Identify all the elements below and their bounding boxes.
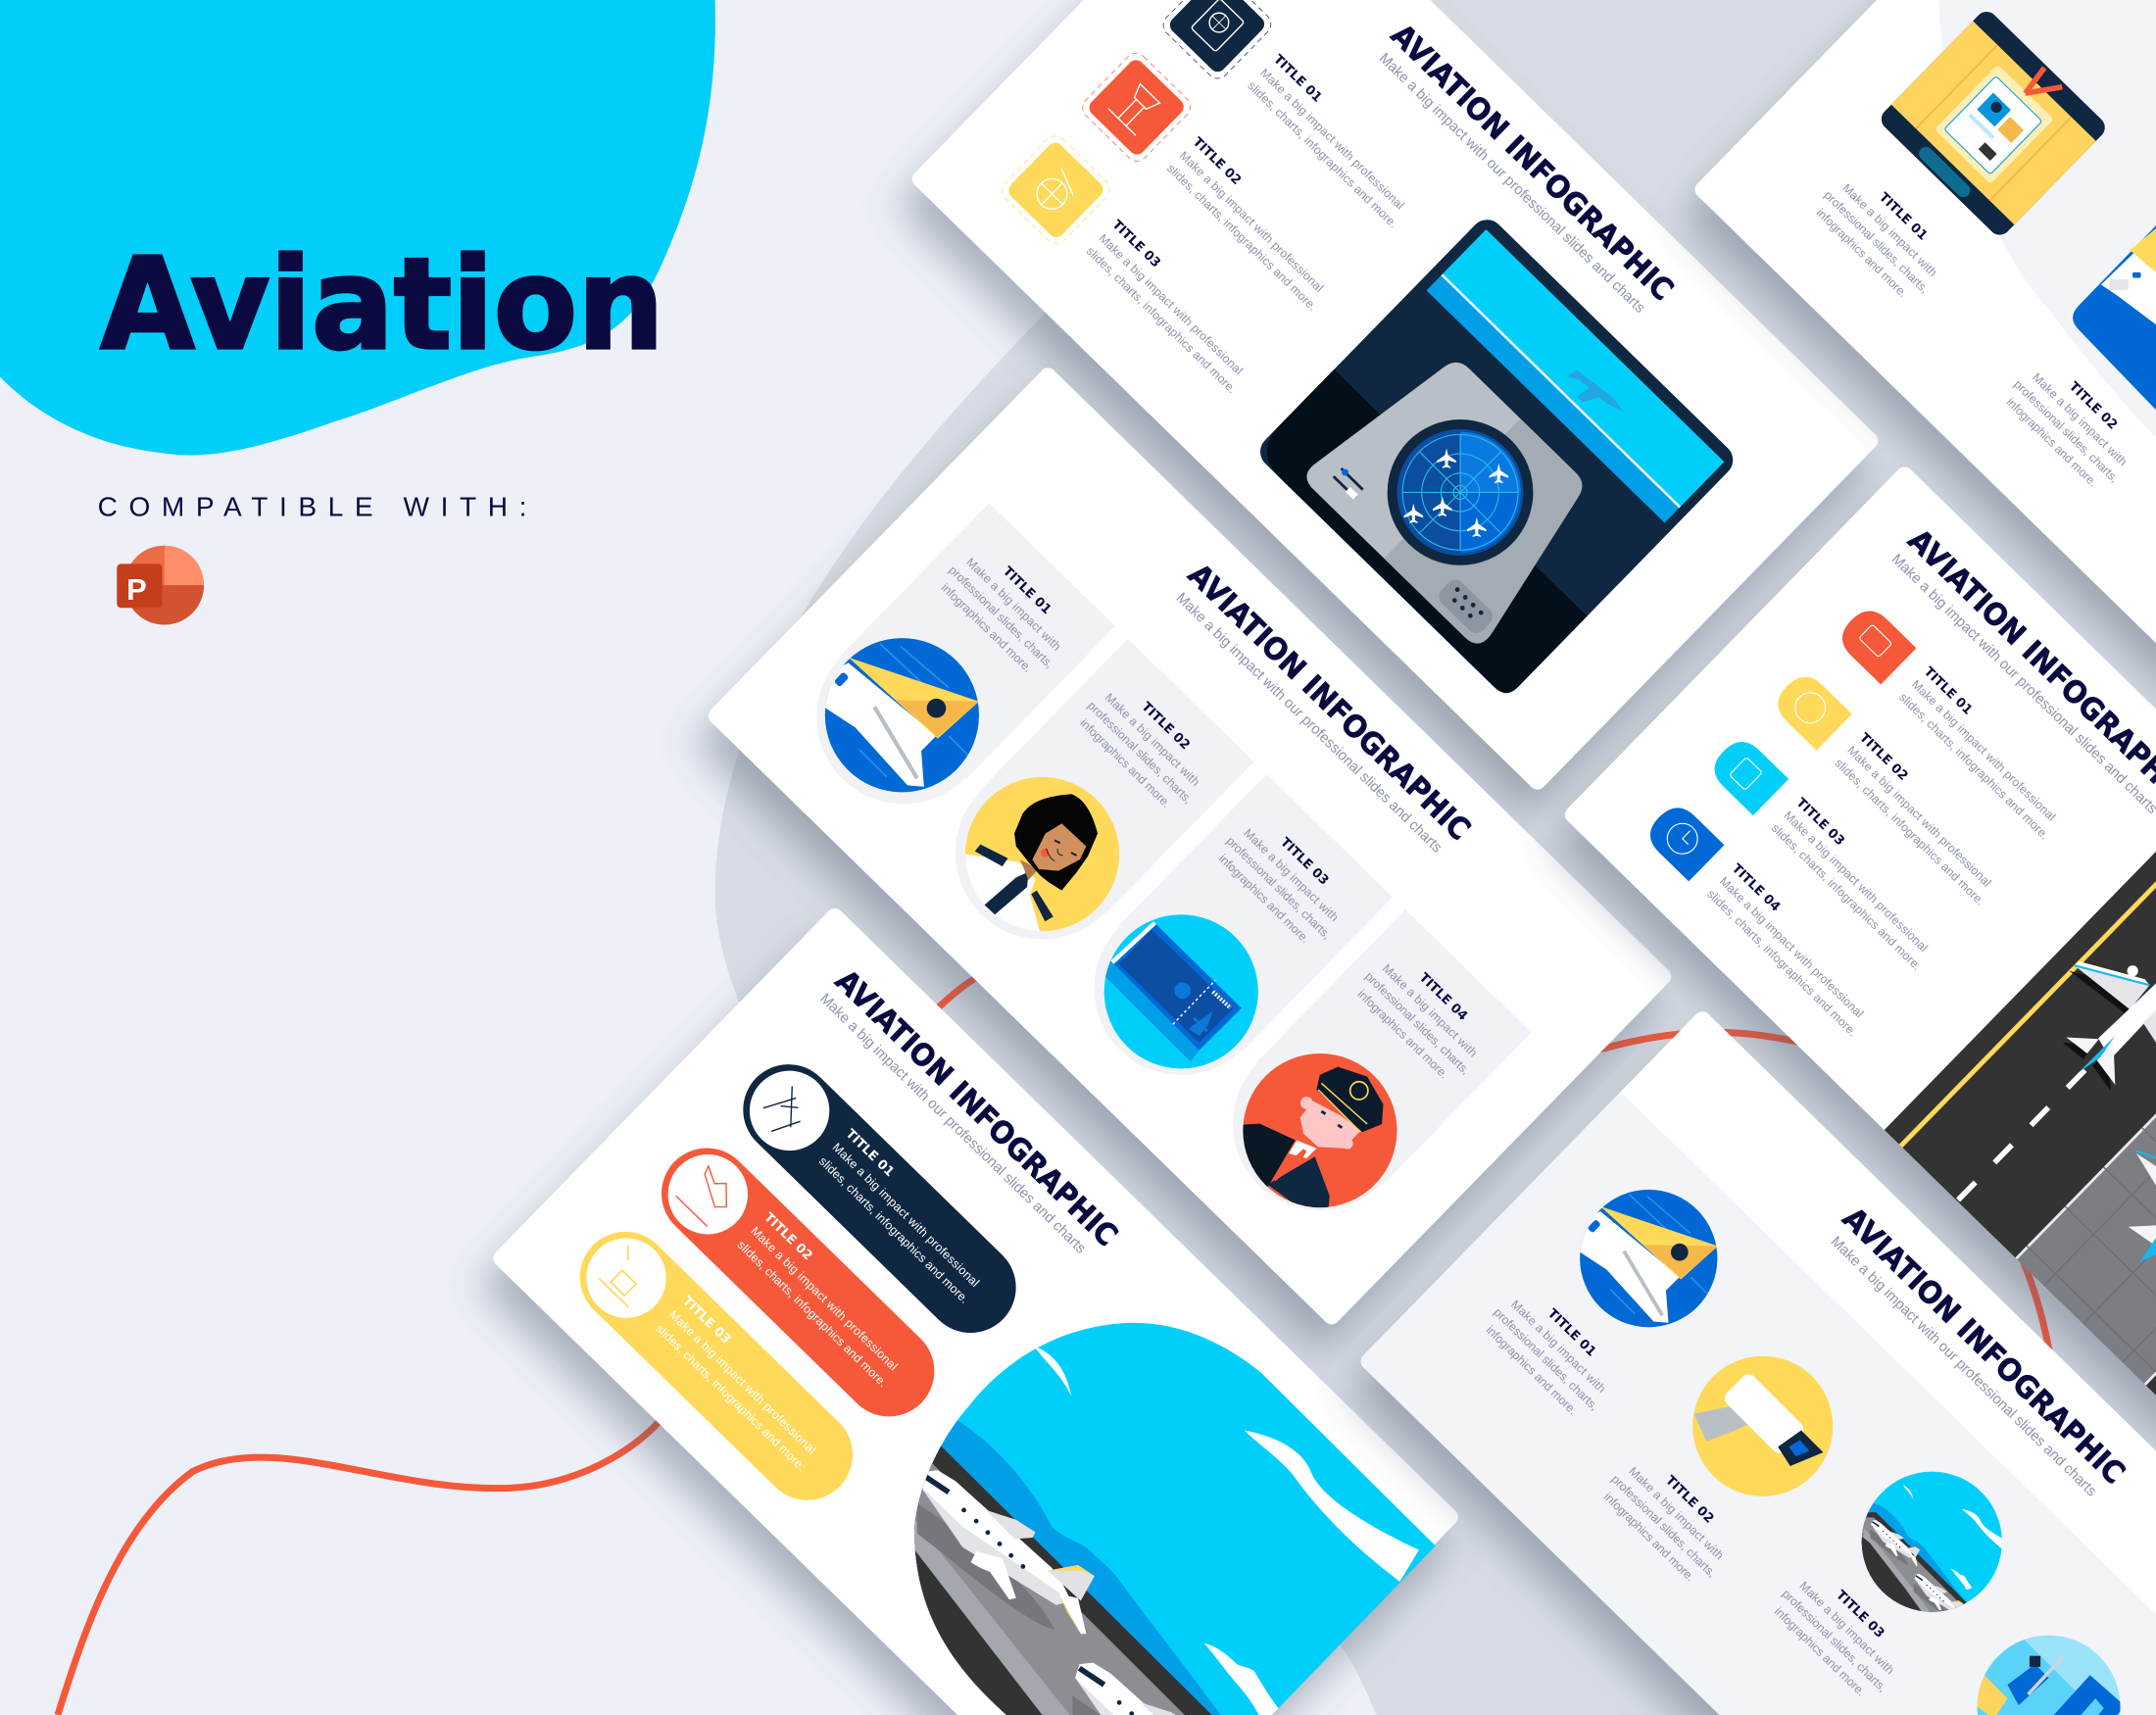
illustration: captain bbox=[1238, 1051, 1399, 1213]
tab icon: blue bbox=[1642, 799, 1724, 881]
item text 01: infographics and more. bbox=[1484, 1323, 1580, 1417]
column 1: Make a big impact with bbox=[963, 556, 1063, 654]
item text 01: Make a big impact with bbox=[1508, 1298, 1608, 1396]
pill 02: TITLE 02 bbox=[760, 1210, 815, 1263]
item text 03: Make a big impact with professional bbox=[1097, 231, 1246, 377]
illustration: airport scene dome bbox=[914, 1323, 1436, 1715]
radar screen bbox=[1388, 419, 1533, 565]
column 4: Make a big impact with bbox=[1380, 961, 1480, 1059]
item text 03: Make a big impact with professional bbox=[1782, 808, 1931, 955]
item text 01: infographics and more. bbox=[1814, 206, 1910, 300]
slide heading: AVIATION INFOGRAPHIC bbox=[1181, 557, 1477, 848]
column 1: infographics and more. bbox=[939, 581, 1035, 675]
item text 01: Make a big impact with professional bbox=[1909, 677, 2058, 823]
item text 01: professional slides, charts, bbox=[1821, 188, 1932, 296]
item text 02: Make a big impact with bbox=[2030, 370, 2130, 468]
item text 01: TITLE 01 bbox=[1921, 664, 1975, 718]
item text 04: TITLE 04 bbox=[1729, 861, 1783, 914]
item text 01: professional slides, charts, bbox=[1491, 1305, 1601, 1413]
slide subtitle: Make a big impact with our professional slides and charts bbox=[1376, 50, 1648, 317]
item text 02: Make a big impact with bbox=[1626, 1464, 1727, 1562]
pill 02: Make a big impact with professional bbox=[748, 1224, 901, 1373]
illustration: taxiing airplanes bbox=[2063, 961, 2156, 1262]
item text 03: TITLE 03 bbox=[1833, 1588, 1886, 1642]
panel: bottom right slide with grey band bbox=[1357, 1008, 2156, 1715]
illustration: boarding pass bbox=[1103, 914, 1258, 1068]
item text 02: TITLE 02 bbox=[1856, 730, 1910, 784]
pill 02 bbox=[643, 1129, 954, 1436]
column 3: infographics and more. bbox=[1216, 852, 1312, 946]
column 1: professional slides, charts, bbox=[946, 564, 1056, 671]
icon: control tower bbox=[1078, 49, 1195, 166]
item text 01: slides, charts, infographics and more. bbox=[1245, 78, 1400, 230]
item text 02: Make a big impact with professional bbox=[1177, 149, 1326, 295]
item text 03: Make a big impact with bbox=[1796, 1579, 1897, 1677]
icon: globe and plane bbox=[998, 131, 1114, 248]
item text 01: slides, charts, infographics and more. bbox=[1896, 690, 2052, 842]
grey content band bbox=[1357, 1092, 2156, 1715]
decorative grey backdrop shape bbox=[715, 0, 2156, 1715]
slide heading: AVIATION INFOGRAPHIC bbox=[1836, 1200, 2132, 1492]
column 4: professional slides, charts, bbox=[1362, 969, 1472, 1077]
item text 03: TITLE 03 bbox=[1793, 796, 1847, 849]
item text 02 bbox=[1596, 1446, 1744, 1592]
panel: bottom left slide with pills bbox=[490, 905, 1471, 1715]
item text 03: TITLE 03 bbox=[1109, 218, 1163, 270]
column 2: TITLE 02 bbox=[1139, 700, 1193, 753]
pill 01: slides, charts, infographics and more. bbox=[816, 1154, 971, 1306]
icon: PowerPoint logo: P bbox=[126, 572, 147, 607]
column 2 bbox=[918, 639, 1253, 976]
pill 03: TITLE 03 bbox=[679, 1294, 733, 1348]
panel: top right slide with ID badge bbox=[1691, 0, 2156, 799]
item text 02: slides, charts, infographics and more. bbox=[1832, 757, 1987, 908]
compatible with label: COMPATIBLE WITH: bbox=[98, 491, 526, 521]
decorative orange curve bbox=[58, 963, 2051, 1715]
column 3 bbox=[1057, 774, 1393, 1111]
item text 02: TITLE 02 bbox=[2066, 379, 2120, 433]
item text 01: TITLE 01 bbox=[1544, 1306, 1598, 1359]
item text 02: slides, charts, infographics and more. bbox=[1164, 162, 1319, 314]
item text 03 bbox=[1767, 1560, 1915, 1707]
panel: top slide with radar bbox=[908, 0, 1882, 793]
item text 01: TITLE 01 bbox=[1270, 52, 1324, 106]
slide subtitle: Make a big impact with our professional slides and charts bbox=[1828, 1233, 2100, 1500]
tab icon: yellow bbox=[1769, 668, 1852, 751]
pill 03 bbox=[562, 1213, 871, 1519]
item text 02 bbox=[1999, 351, 2147, 498]
tab icon: cyan bbox=[1706, 733, 1788, 815]
panel: centre slide with four circles bbox=[705, 365, 1675, 1328]
illustration: wing circle bbox=[825, 638, 979, 792]
item text 04: slides, charts, infographics and more. bbox=[1704, 887, 1860, 1039]
light backdrop shape bbox=[1938, 0, 2156, 437]
illustration: airport scene small bbox=[1862, 1472, 2002, 1612]
column 2: Make a big impact with bbox=[1102, 691, 1202, 789]
illustration: woman pilot bbox=[964, 776, 1119, 931]
pill 03: slides, charts, infographics and more. bbox=[653, 1321, 808, 1474]
slide subtitle: Make a big impact with our professional slides and charts bbox=[1173, 590, 1446, 857]
column 4 bbox=[1196, 909, 1532, 1248]
icon: PowerPoint logo bbox=[117, 546, 204, 625]
column 3: professional slides, charts, bbox=[1224, 834, 1334, 942]
icon: passport bbox=[1158, 0, 1275, 83]
cockpit illustration frame bbox=[1253, 213, 1740, 699]
item text 03: slides, charts, infographics and more. bbox=[1769, 821, 1924, 973]
item text 04: Make a big impact with professional bbox=[1717, 874, 1866, 1020]
item text 01: Make a big impact with bbox=[1839, 181, 1940, 279]
item text 01 bbox=[1479, 1279, 1627, 1426]
pill 01 bbox=[724, 1046, 1035, 1351]
item text 01: TITLE 01 bbox=[1876, 190, 1930, 243]
column 3: Make a big impact with bbox=[1241, 826, 1342, 924]
item text 02: TITLE 02 bbox=[1662, 1473, 1716, 1527]
main title: Aviation bbox=[100, 231, 664, 378]
item text 02: professional slides, charts, bbox=[1609, 1472, 1719, 1580]
column 4: TITLE 04 bbox=[1416, 970, 1470, 1024]
item text 02: professional slides, charts, bbox=[2011, 377, 2122, 485]
slide heading: AVIATION INFOGRAPHIC bbox=[828, 963, 1124, 1253]
illustration: airport terminal bbox=[1978, 1635, 2121, 1715]
item text 03: professional slides, charts, bbox=[1780, 1587, 1889, 1694]
item text 03: slides, charts, infographics and more. bbox=[1084, 244, 1239, 396]
cyan blob header bbox=[0, 0, 715, 455]
tab icon: orange bbox=[1834, 602, 1916, 685]
panel: right slide with runway bbox=[1561, 464, 2156, 1424]
item text 02: Make a big impact with professional bbox=[1844, 744, 1994, 890]
item text 03: infographics and more. bbox=[1772, 1604, 1868, 1698]
column 4: infographics and more. bbox=[1354, 987, 1451, 1081]
item text 01: Make a big impact with professional bbox=[1257, 66, 1407, 212]
illustration: runway bbox=[1885, 778, 2156, 1424]
column 1 bbox=[780, 504, 1115, 841]
item text 01 bbox=[1809, 162, 1957, 309]
slide subtitle: Make a big impact with our professional slides and charts bbox=[816, 991, 1089, 1257]
illustration: security camera bbox=[1692, 1356, 1833, 1496]
item text 02: infographics and more. bbox=[1601, 1490, 1697, 1584]
illustration: wing circle small bbox=[1580, 1190, 1717, 1327]
illustration: wing on blue bbox=[2073, 225, 2156, 410]
column 2: infographics and more. bbox=[1077, 716, 1173, 810]
column 3: TITLE 03 bbox=[1277, 835, 1331, 888]
column 1: TITLE 01 bbox=[1000, 564, 1054, 617]
pill 01: Make a big impact with professional bbox=[830, 1141, 982, 1290]
pill 02: slides, charts, infographics and more. bbox=[735, 1238, 890, 1390]
slide heading: AVIATION INFOGRAPHIC bbox=[1384, 18, 1680, 308]
column 2: professional slides, charts, bbox=[1085, 699, 1195, 807]
item text 02: TITLE 02 bbox=[1190, 135, 1244, 188]
illustration: ID badge bbox=[1877, 7, 2109, 239]
item text 02: infographics and more. bbox=[2004, 395, 2100, 489]
pill 01: TITLE 01 bbox=[843, 1127, 897, 1180]
pill 03: Make a big impact with professional bbox=[666, 1307, 818, 1457]
